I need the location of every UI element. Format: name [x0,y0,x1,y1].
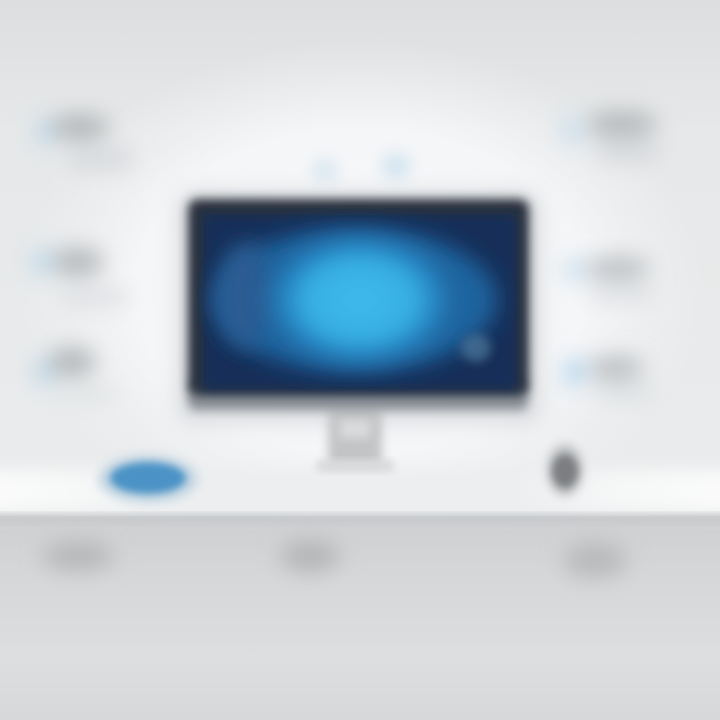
pad halo [98,455,198,503]
lower left blob [42,542,114,570]
monitor stand [316,408,394,472]
right item 2 [564,256,652,300]
screen left tint [219,243,271,347]
cup halo [547,444,583,496]
right info items [562,111,658,400]
lower centre blob [280,541,340,571]
small icon left [312,160,338,180]
cup body [552,454,578,488]
cup [547,444,583,496]
screen glow [256,226,464,374]
left item 3 [33,347,116,400]
floor reflection [0,516,720,720]
right item 1 [562,111,658,160]
monitor chin [188,380,528,410]
background wall [0,0,720,520]
screen mid field [213,228,497,372]
lower right blob [563,542,627,578]
stand neck [328,408,382,466]
lower text blobs [42,541,627,578]
monitor shadow [178,192,540,422]
top small icons [312,154,411,180]
left item 2 [31,247,126,304]
pad centre [110,462,186,494]
right item 3 [564,355,653,400]
monitor bezel [188,199,529,395]
monitor screen [203,214,517,390]
small icon right [381,154,411,178]
stand highlight [340,420,370,438]
screen detail [461,334,491,362]
monitor [188,199,529,410]
mouse pad [98,455,198,503]
desk surface [0,470,720,512]
desk edge shadow [0,514,720,524]
left item 1 [35,114,132,168]
left info items [31,114,132,400]
background glow [15,40,705,540]
stand base [316,460,394,472]
